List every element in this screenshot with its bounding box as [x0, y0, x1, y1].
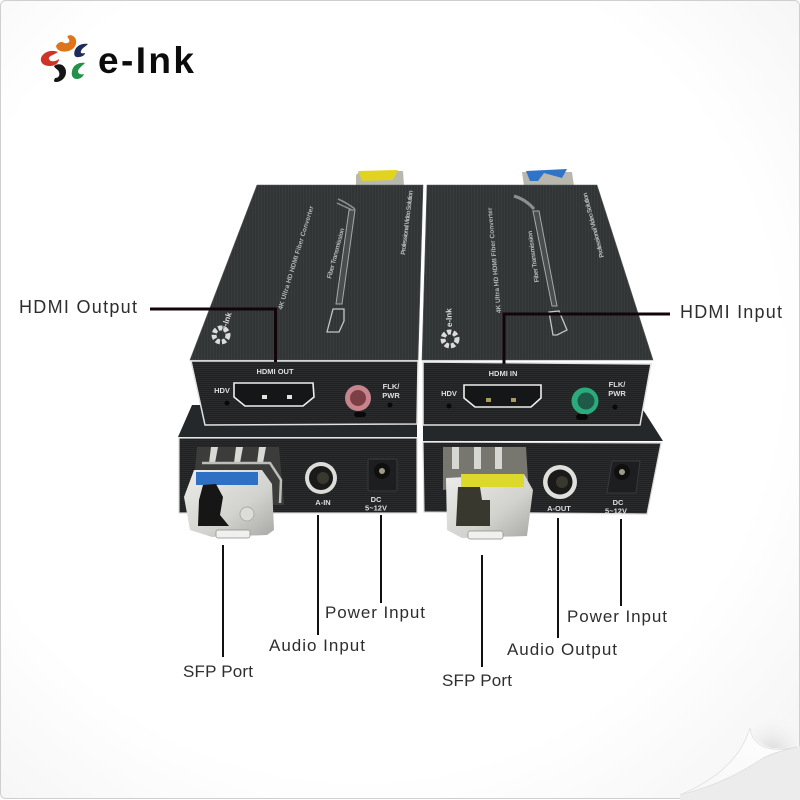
- jack slot: [576, 414, 588, 420]
- top print: fiber: Fiber Transmission: [527, 230, 541, 283]
- callout: SFP Port right: SFP Port: [442, 671, 512, 690]
- logo: e-Ink: [41, 35, 194, 82]
- callout: HDMI Input: [504, 302, 782, 364]
- top print: slot: [336, 210, 355, 304]
- upper front panel: PWR: [382, 391, 400, 400]
- logo icon: five coloured crescents: [41, 35, 88, 82]
- callout: Power Input left: Power Input: [325, 603, 425, 622]
- lower front panel: 5~12V: [365, 504, 387, 512]
- SFP tab: blue: [522, 169, 574, 186]
- top print: slogan: Professional Video Solution: [400, 190, 415, 255]
- lower front panel: [179, 438, 417, 513]
- callout: Power Input left: [325, 515, 425, 622]
- HDMI port: [464, 385, 541, 407]
- callout: SFP Port left: SFP Port: [183, 662, 253, 681]
- label: HDV: HDV: [441, 389, 457, 398]
- label: FLK/PWR: FLK/: [383, 382, 400, 391]
- top print: slot: [533, 211, 557, 306]
- label: HDMI IN: HDMI IN: [489, 369, 517, 378]
- top print: micro HDMI: [327, 309, 344, 332]
- top print: model: 4K Ultra HD HDMI Fiber Converter: [277, 205, 316, 311]
- upper front panel: [423, 362, 651, 425]
- upper chassis top face: [190, 185, 423, 360]
- SFP module: blue latch: [184, 447, 284, 538]
- top print: slogan: Professional Video Solution: [582, 192, 606, 258]
- jack slot: [354, 412, 366, 417]
- callout: Power Input right: Power Input: [567, 607, 667, 626]
- upper front panel: [191, 361, 418, 425]
- upper chassis top face: [422, 185, 653, 360]
- callout: HDMI Output: HDMI Output: [19, 297, 137, 317]
- lower chassis top: [178, 405, 417, 437]
- callout: SFP Port left: [183, 545, 253, 681]
- top print: micro HDMI: [549, 311, 567, 335]
- LED: HDV: [446, 404, 452, 408]
- callout: Audio Output: Audio Output: [507, 640, 617, 659]
- label: FLK/PWR: FLK/: [609, 380, 626, 389]
- lower chassis top: [423, 405, 663, 441]
- top print: model: 4K Ultra HD HDMI Fiber Converter: [487, 207, 503, 313]
- SFP tab: yellow: [356, 170, 404, 186]
- top logo: e-lnk: [219, 311, 234, 332]
- LED: FLK/PWR: [388, 402, 392, 408]
- device: left transmitter: [178, 170, 423, 538]
- audio jack: A-IN: [305, 462, 337, 494]
- DC power socket: [607, 461, 640, 493]
- audio jack: pink: [345, 385, 371, 411]
- audio jack: A-OUT: [543, 465, 577, 499]
- logo wordmark: e-Ink: [98, 40, 194, 81]
- label: HDMI OUT: HDMI OUT: [256, 367, 294, 376]
- label: A-OUT: A-OUT: [547, 504, 571, 513]
- lower front panel: 5~12V: [605, 506, 627, 516]
- callout: Power Input right: [567, 519, 667, 626]
- top print: fiber: Fiber Transmission: [326, 227, 346, 280]
- SFP module: yellow latch: [443, 447, 533, 539]
- LED: FLK/PWR: [612, 404, 618, 410]
- callout: HDMI Output: [19, 297, 276, 362]
- audio jack: green: [572, 388, 598, 414]
- upper front panel: PWR: [608, 389, 626, 398]
- device: right receiver: [422, 169, 663, 539]
- page curl: [680, 712, 800, 800]
- label: DC 5~12V: DC: [371, 495, 382, 504]
- LED: HDV: [224, 400, 230, 406]
- callout: HDMI Input: HDMI Input: [680, 302, 782, 322]
- callout: Audio Input: Audio Input: [269, 636, 365, 655]
- callout: SFP Port right: [442, 555, 512, 690]
- top logo: e-lnk: [444, 308, 454, 327]
- label: DC 5~12V: DC: [613, 498, 624, 507]
- label: A-IN: A-IN: [315, 498, 331, 507]
- DC power socket: [368, 459, 397, 491]
- label: HDV: HDV: [214, 386, 230, 395]
- callout: Audio Input: [269, 515, 365, 655]
- HDMI port: [234, 383, 314, 406]
- lower front panel: [423, 442, 661, 516]
